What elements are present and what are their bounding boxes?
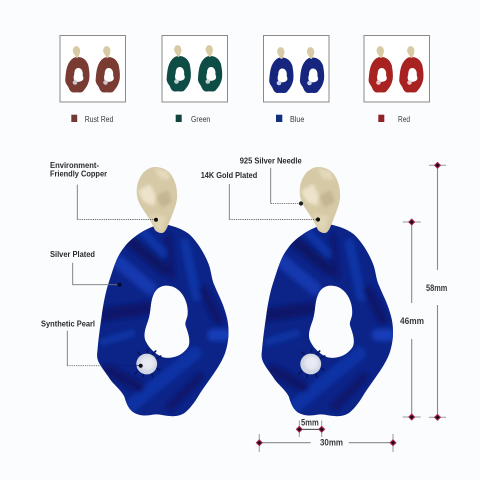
left earring [97,167,229,416]
callout: 14K gold plated: 14K Gold Plated [201,170,257,180]
legend: green: Green [191,114,210,124]
callout: environment-friendly copper [50,160,158,222]
dimension: 5mm [296,418,325,437]
callout: silver plated [50,249,122,287]
callout: environment-friendly copper: Friendly Copper [50,169,108,179]
callout: 925 silver needle [240,156,303,206]
left earring pearl [135,349,161,377]
panel: rust red variant [60,36,126,102]
panel: red variant [364,36,430,102]
dimension: 46mm [400,218,424,421]
legend: blue [276,114,304,124]
callout: synthetic pearl [41,318,143,368]
right earring [262,167,393,416]
left earring gold stud [137,167,177,233]
right earring body [262,224,393,416]
callout: synthetic pearl: Synthetic Pearl [41,318,95,328]
legend: green [176,114,210,124]
callout: 925 silver needle: 925 Silver Needle [240,156,302,166]
legend: rust red: Rust Red [85,114,113,124]
panel: green variant [162,36,228,102]
dimension: 58mm: 58mm [426,283,447,293]
dimension: 30mm: 30mm [320,438,343,448]
callout: silver plated: Silver Plated [50,249,95,259]
left earring body [97,224,229,416]
legend: rust red [71,114,113,124]
panel: blue variant [264,36,329,102]
legend: red [378,114,410,124]
dimension: 30mm [256,434,397,452]
callout: environment-friendly copper: Environment- [50,160,99,170]
dimension: 58mm [426,162,447,421]
right earring gold stud [300,167,340,233]
dimension: 46mm: 46mm [400,316,424,326]
callout: 14K gold plated [201,170,320,222]
dimension: 5mm: 5mm [301,418,319,428]
right earring pearl [299,349,325,377]
legend: red: Red [398,114,410,124]
legend: blue: Blue [290,114,304,124]
